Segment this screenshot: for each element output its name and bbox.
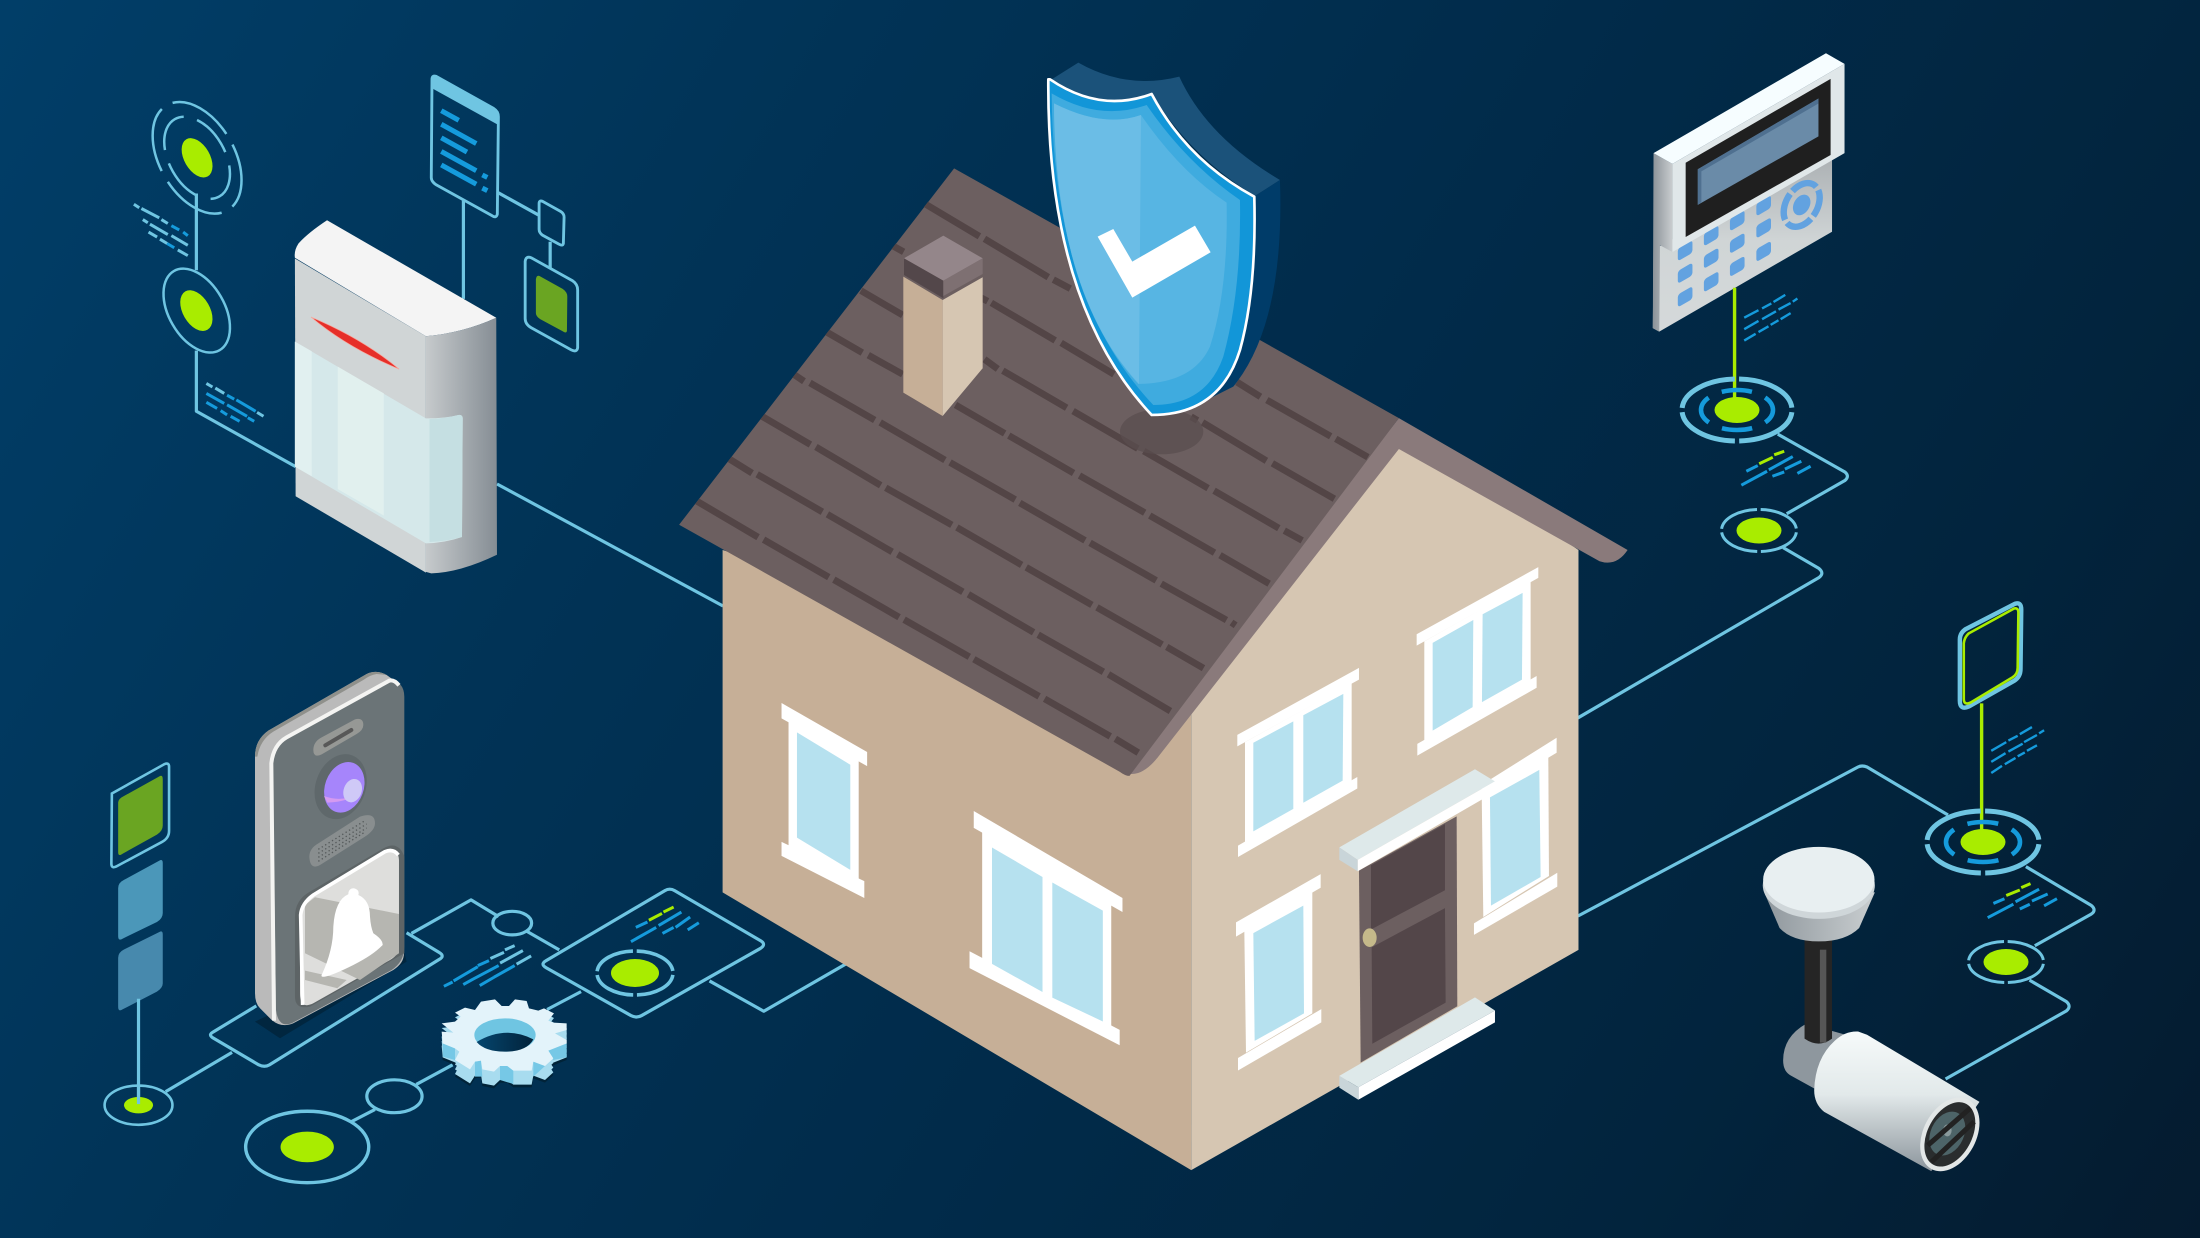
small square node xyxy=(539,201,564,245)
keypad target main xyxy=(1682,379,1792,441)
doorbell device xyxy=(255,672,407,1038)
roof xyxy=(679,168,1399,776)
gear face xyxy=(442,999,567,1072)
small target xyxy=(105,1084,172,1125)
camera target main xyxy=(1927,811,2039,873)
door step xyxy=(1339,997,1495,1100)
sensor top xyxy=(295,220,496,336)
lower window left xyxy=(1236,874,1321,1071)
keypad cluster xyxy=(1578,53,1847,718)
data marks teal xyxy=(1741,451,1811,485)
keypad target secondary xyxy=(1722,510,1796,552)
camera device xyxy=(1763,847,1992,1184)
connector circle xyxy=(493,911,532,935)
shield back edge xyxy=(1052,63,1280,196)
upper window two xyxy=(1417,567,1538,756)
connector: vertical wire xyxy=(196,194,296,467)
gear connector circle xyxy=(367,1080,422,1113)
upper window one xyxy=(1237,668,1359,857)
left wall xyxy=(723,550,1191,1170)
camera lens xyxy=(1908,1085,1992,1184)
sensor front xyxy=(295,258,426,573)
wires xyxy=(1946,867,2094,1079)
data marks doorbell xyxy=(444,946,531,986)
keypad display frame xyxy=(1672,64,1845,252)
keypad screen xyxy=(1686,79,1831,237)
left window double xyxy=(970,811,1122,1045)
speaker grille xyxy=(309,815,375,867)
network panel xyxy=(543,889,764,1017)
data marks teal xyxy=(1988,884,2057,918)
gear hole xyxy=(474,1018,536,1052)
keypad d-pad xyxy=(1776,177,1827,233)
green box node xyxy=(525,257,578,351)
shield check mark xyxy=(1098,226,1211,298)
chimney xyxy=(903,236,983,416)
camera dome xyxy=(1763,847,1875,941)
connector: lime wire xyxy=(1980,703,1983,831)
camera body xyxy=(1814,1031,1979,1171)
connector: lime wire xyxy=(1733,288,1736,399)
doorbell faceplate xyxy=(273,682,404,1024)
doorbell base panel xyxy=(210,933,442,1066)
connector: wires xyxy=(139,900,860,1122)
big target xyxy=(246,1111,369,1183)
connector lines to house xyxy=(497,484,1948,916)
door xyxy=(1359,816,1457,1063)
doorbell shadow xyxy=(255,952,407,1038)
chimney and shield xyxy=(903,63,1280,454)
wires xyxy=(1578,434,1847,718)
icon: lower target xyxy=(150,257,244,364)
icon: outer target xyxy=(134,87,260,229)
panel target xyxy=(597,951,673,995)
camera target secondary xyxy=(1968,942,2044,982)
gear icon xyxy=(442,999,567,1088)
left window small xyxy=(782,703,867,898)
shield side xyxy=(1207,180,1280,400)
shield front xyxy=(1048,79,1255,415)
house xyxy=(679,63,1628,1170)
motion sensor device xyxy=(295,220,497,573)
keypad lower plate xyxy=(1653,151,1832,332)
gear shadow xyxy=(442,1016,567,1088)
bell button xyxy=(295,846,404,1007)
right wall xyxy=(1191,428,1578,1170)
data marks keypad xyxy=(1744,295,1797,341)
data marks upper xyxy=(134,204,188,256)
connectors: document to boxes xyxy=(463,193,550,299)
blue tiles xyxy=(118,860,163,1010)
camera pole xyxy=(1805,938,1832,1044)
doorbell network cluster xyxy=(105,764,860,1183)
data marks camera xyxy=(1991,727,2044,773)
roof shingles xyxy=(693,203,1368,753)
doorbell body back xyxy=(255,672,404,1025)
data marks lower xyxy=(206,383,263,421)
keypad keys xyxy=(1678,195,1771,307)
house walls and roof xyxy=(679,168,1628,1170)
keypad top xyxy=(1654,53,1845,164)
lower window right xyxy=(1474,738,1557,935)
sensor side xyxy=(426,318,497,573)
doorbell white edge xyxy=(271,680,399,1021)
sensor lens window xyxy=(295,342,463,543)
green selector tile xyxy=(111,764,169,867)
camera slot xyxy=(313,719,363,756)
roof fascia xyxy=(1122,418,1628,774)
document card xyxy=(431,76,498,217)
gear depth xyxy=(442,1004,567,1086)
red indicator xyxy=(311,317,399,369)
motion sensor cluster xyxy=(134,76,578,573)
front wall details xyxy=(1236,567,1557,1100)
door canopy xyxy=(1339,769,1495,871)
icon: bell xyxy=(321,888,383,977)
data marks panel xyxy=(631,907,699,942)
shield shadow xyxy=(1120,409,1203,454)
doorbell top edge shade xyxy=(255,672,387,757)
keypad left side xyxy=(1653,153,1672,332)
camera lens xyxy=(306,747,376,827)
lime outline box xyxy=(1960,603,2021,708)
camera cluster xyxy=(1763,603,2094,1184)
camera mount xyxy=(1783,1024,1846,1092)
